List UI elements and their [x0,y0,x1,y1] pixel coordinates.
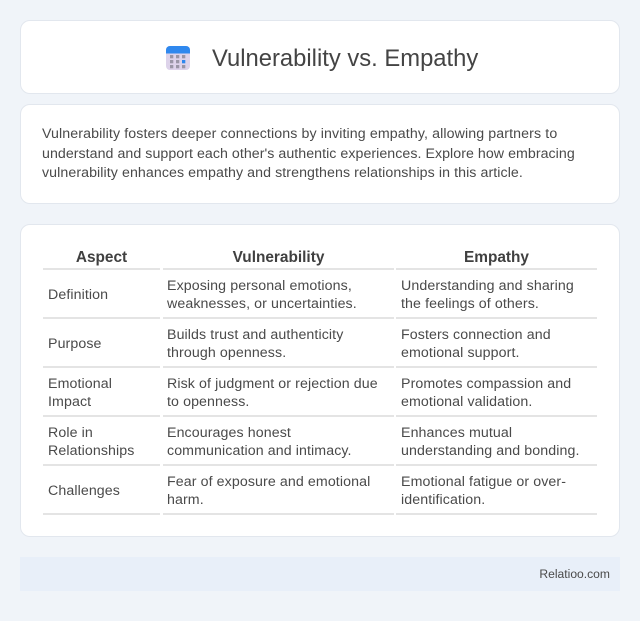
intro text [42,126,575,181]
row: Definition: Definition [48,287,108,303]
row: Purpose: Builds trust and authenticity [167,327,343,343]
row: Challenges: identification. [401,492,485,508]
row: Purpose: emotional support. [401,345,520,361]
row: Emotional Impact: emotional validation. [401,394,532,410]
table header: Empathy: Empathy [464,249,529,266]
row: Role in Relationships: Role in [48,425,93,441]
row: Definition: the feelings of others. [401,296,539,312]
table panel [20,224,620,537]
intro panel [20,104,620,204]
table header: Vulnerability: Vulnerability [233,249,324,266]
intro text: vulnerability enhances empathy and strengthens relationships in this article. [42,165,523,181]
intro text: Vulnerability fosters deeper connections by inviting empathy, allowing partners to [42,126,557,142]
row: Challenges: Fear of exposure and emotional [167,474,370,490]
row: Definition: Exposing personal emotions, [167,278,352,294]
row: Purpose: Purpose [48,336,102,352]
row: Emotional Impact [48,376,571,410]
row: Role in Relationships: understanding and bonding. [401,443,580,459]
row: Definition [48,278,574,312]
footer text: Relatioo.com [539,567,610,581]
row: Definition: Understanding and sharing [401,278,574,294]
row: Role in Relationships: Enhances mutual [401,425,512,441]
row: Emotional Impact: to openness. [167,394,249,410]
row: Role in Relationships: communication and intimacy. [167,443,352,459]
row: Role in Relationships [48,425,580,459]
icon: calendar [166,46,190,70]
header panel [20,20,620,94]
row: Challenges: Emotional fatigue or over- [401,474,566,490]
row: Emotional Impact: Impact [48,394,91,410]
footer bar [20,557,620,591]
row: Emotional Impact: Promotes compassion and [401,376,571,392]
table header: Aspect: Aspect [76,249,127,266]
row: Challenges [48,474,566,508]
row: Purpose: through openness. [167,345,286,361]
row: Purpose: Fosters connection and [401,327,551,343]
row: Role in Relationships: Relationships [48,443,134,459]
row: Role in Relationships: Encourages honest [167,425,291,441]
row: Emotional Impact: Risk of judgment or rejection due [167,376,378,392]
row: Challenges: harm. [167,492,204,508]
row: Challenges: Challenges [48,483,120,499]
row: Emotional Impact: Emotional [48,376,112,392]
title: Vulnerability vs. Empathy [212,45,478,72]
row: Purpose [48,327,551,361]
row: Definition: weaknesses, or uncertainties. [167,296,357,312]
intro text: understand and support each other's authentic experiences. Explore how embracing [42,146,575,162]
